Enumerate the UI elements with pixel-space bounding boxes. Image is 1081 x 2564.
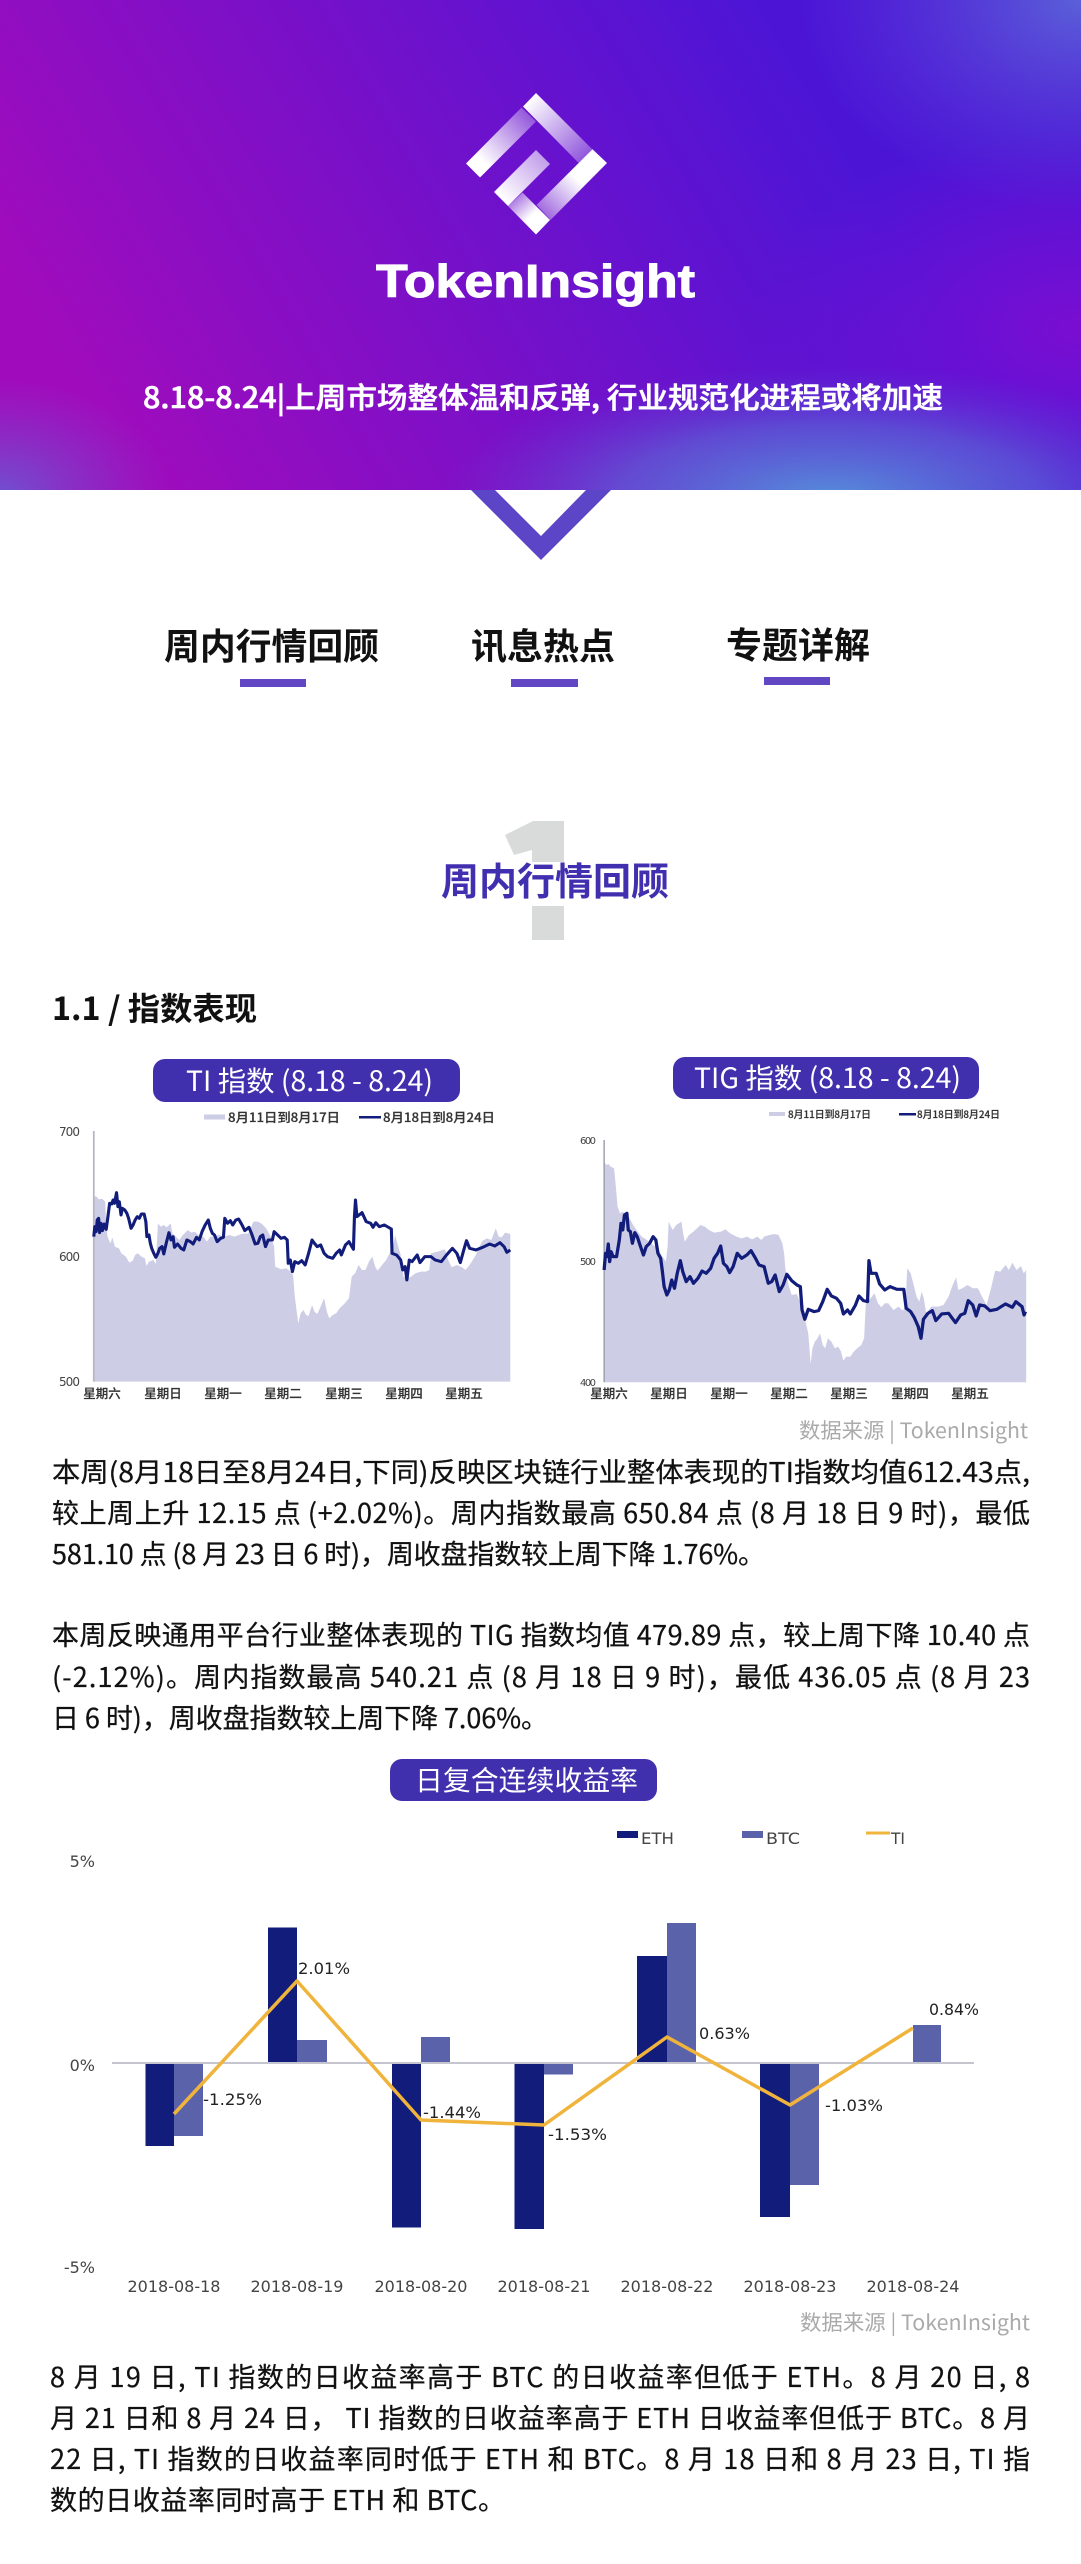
text block: TIG index summary: (-2.12%)。周内指数最高 540.21 点 (8 月 18 日 9 时)，最低 436.05 点 (8 月 23 (52, 1656, 1030, 1695)
y axis labels (580, 1136, 596, 1389)
y axis labels: 5% (70, 1852, 95, 1871)
text block: TI index summary: 581.10 点 (8 月 23 日 6 时)，周收盘指数较上周下降 1.76%。 (52, 1533, 765, 1572)
section heading with large numeral 1: 周内行情回顾 (441, 851, 669, 906)
zero axis (112, 2062, 974, 2064)
x axis labels: 星期二 (770, 1383, 808, 1402)
icon: chevron arrow (471, 490, 611, 560)
x axis labels: 星期五 (951, 1383, 989, 1402)
x axis labels: 2018-08-22 (621, 2277, 713, 2296)
x axis labels: 2018-08-24 (867, 2277, 959, 2296)
x axis labels (83, 1383, 483, 1402)
text block: TI index summary: 较上周上升 12.15 点 (+2.02%)。周内指数最高 650.84 点 (8 月 18 日 9 时)，最低 (52, 1492, 1030, 1531)
data labels: 2.01% (298, 1959, 350, 1978)
x axis labels: 星期四 (385, 1383, 423, 1402)
badge: TI index: TI 指数 (8.18 - 8.24) (186, 1060, 433, 1100)
text block: return comparison: 22 日, TI 指数的日收益率同时低于 ETH 和 BTC。8 月 18 日和 8 月 23 日, TI 指 (50, 2438, 1030, 2477)
area and line chart (94, 1131, 510, 1382)
tab: weekly review: 周内行情回顾 (164, 618, 379, 670)
text block: return comparison: 月 21 日和 8 月 24 日， TI 指数的日收益率高于 ETH 日收益率但低于 BTC。8 月 (50, 2397, 1030, 2436)
legend: 8月18日到8月24日 (917, 1106, 1000, 1121)
data labels: 0.63% (699, 2024, 750, 2043)
legend (769, 1106, 1000, 1121)
x axis labels: 星期六 (83, 1383, 121, 1402)
x axis labels: 2018-08-18 (128, 2277, 220, 2296)
tab: topics: 专题详解 (726, 617, 870, 669)
legend: TI (890, 1829, 905, 1848)
x axis labels: 星期三 (325, 1383, 363, 1402)
data labels: -1.25% (203, 2090, 262, 2109)
legend: 8月11日到8月17日 (788, 1106, 871, 1121)
text block: TIG index summary: 本周反映通用平台行业整体表现的 TIG 指数均值 479.89 点，较上周下降 10.40 点 (52, 1614, 1030, 1653)
text block: return comparison: 8 月 19 日, TI 指数的日收益率高于 BTC 的日收益率但低于 ETH。8 月 20 日, 8 (50, 2356, 1030, 2395)
data labels (203, 1959, 979, 2144)
data source note 2: 数据来源 | TokenInsight (800, 2307, 1030, 2337)
TI line (174, 1981, 913, 2125)
legend: ETH (641, 1829, 674, 1848)
legend (204, 1107, 495, 1126)
y axis labels (59, 1125, 80, 1389)
x axis labels (128, 2277, 959, 2296)
data labels: -1.44% (423, 2103, 481, 2122)
y axis labels: 400 (580, 1378, 596, 1389)
data labels: -1.03% (825, 2096, 883, 2115)
text block: TI index summary: 本周(8月18日至8月24日,下同)反映区块链行业整体表现的TI指数均值612.43点, (52, 1451, 1030, 1490)
x axis labels: 2018-08-20 (375, 2277, 467, 2296)
legend: BTC (766, 1829, 800, 1848)
y axis labels: 700 (59, 1125, 80, 1139)
area and line chart (604, 1140, 1026, 1382)
y axis labels: 500 (580, 1257, 596, 1268)
report title: 8.18-8.24|上周市场整体温和反弹, 行业规范化进程或将加速 (143, 375, 943, 417)
data source note 1: 数据来源 | TokenInsight (799, 1415, 1028, 1445)
x axis labels: 星期一 (204, 1383, 242, 1402)
text block: return comparison (50, 2356, 1030, 2518)
legend: 8月11日到8月17日 (228, 1107, 340, 1126)
x axis labels: 星期二 (264, 1383, 302, 1402)
y axis labels: 600 (59, 1250, 80, 1264)
legend: 8月18日到8月24日 (383, 1107, 495, 1126)
data labels: -1.53% (548, 2125, 607, 2144)
badge: TIG index: TIG 指数 (8.18 - 8.24) (694, 1057, 961, 1097)
x axis labels: 星期五 (445, 1383, 483, 1402)
y axis labels (64, 1852, 95, 2277)
legend (617, 1829, 905, 1848)
bars: ETH (146, 1928, 790, 2229)
x axis labels: 星期日 (144, 1383, 182, 1402)
tab: news: 讯息热点 (471, 618, 615, 670)
x axis labels: 2018-08-23 (744, 2277, 836, 2296)
y axis labels: -5% (64, 2258, 95, 2277)
x axis labels: 星期四 (891, 1383, 929, 1402)
x axis labels (590, 1383, 989, 1402)
banner background (0, 0, 1081, 490)
y axis labels: 600 (580, 1136, 596, 1147)
x axis labels: 2018-08-19 (251, 2277, 343, 2296)
badge: daily return: 日复合连续收益率 (415, 1758, 638, 1798)
y axis labels: 500 (59, 1375, 80, 1389)
x axis labels: 星期日 (650, 1383, 688, 1402)
subheading 1.1: 1.1 / 指数表现 (52, 984, 257, 1030)
x axis labels: 星期六 (590, 1383, 628, 1402)
data labels: 0.84% (929, 2000, 979, 2019)
x axis labels: 星期三 (830, 1383, 868, 1402)
x axis labels: 2018-08-21 (498, 2277, 590, 2296)
navigation tabs (164, 617, 870, 687)
y axis labels: 0% (70, 2056, 95, 2075)
bar and line chart: daily compound return (64, 1829, 979, 2296)
logo wordmark: TokenInsight (376, 255, 695, 307)
bars: BTC (174, 1923, 941, 2185)
text block: TI index summary (52, 1451, 1030, 1572)
panel: TIG index chart (580, 1057, 1026, 1402)
text block: TIG index summary: 日 6 时)，周收盘指数较上周下降 7.06%。 (52, 1697, 548, 1736)
text block: return comparison: 数的日收益率同时高于 ETH 和 BTC。 (50, 2479, 505, 2518)
text block: TIG index summary (52, 1614, 1030, 1736)
x axis labels: 星期一 (710, 1383, 748, 1402)
section heading with large numeral 1 (441, 821, 669, 940)
icon: TokenInsight logo diamond (466, 93, 607, 234)
panel: TI index chart (59, 1059, 510, 1402)
